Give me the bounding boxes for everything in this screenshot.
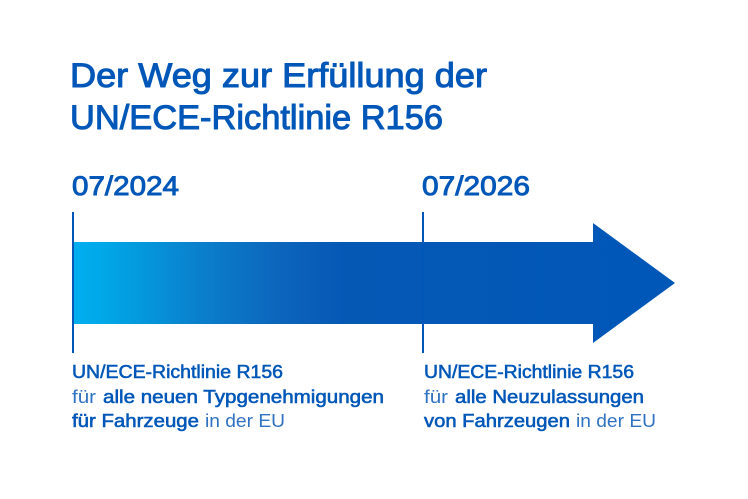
text block: 07/2024 milestone: in der EU	[205, 411, 285, 431]
text block: 07/2026 milestone: UN/ECE-Richtlinie R156	[424, 362, 634, 382]
text block: 07/2026 milestone	[424, 362, 656, 431]
title: UN/ECE-Richtlinie R156	[70, 99, 443, 137]
text block: 07/2024 milestone: für	[72, 387, 96, 407]
text block: 07/2026 milestone: für	[424, 387, 448, 407]
text block: 07/2024 milestone: UN/ECE-Richtlinie R156	[72, 362, 283, 382]
text block: 07/2026 milestone: in der EU	[576, 411, 656, 431]
title	[70, 57, 487, 137]
text block: 07/2026 milestone: alle Neuzulassungen	[455, 387, 644, 407]
text block: 07/2024 milestone: für Fahrzeuge	[72, 411, 199, 431]
text block: 07/2024 milestone	[72, 362, 384, 431]
text block: 07/2026 milestone: von Fahrzeugen	[424, 411, 570, 431]
title: Der Weg zur Erfüllung der	[70, 57, 487, 95]
text block: 07/2024 milestone: alle neuen Typgenehmigungen	[103, 387, 384, 407]
marker line: 07/2024	[72, 212, 74, 353]
timeline arrow	[74, 223, 675, 343]
date label: 07/2024: 07/2024	[72, 171, 179, 201]
date label: 07/2026: 07/2026	[422, 171, 530, 201]
marker line: 07/2026	[422, 212, 424, 353]
